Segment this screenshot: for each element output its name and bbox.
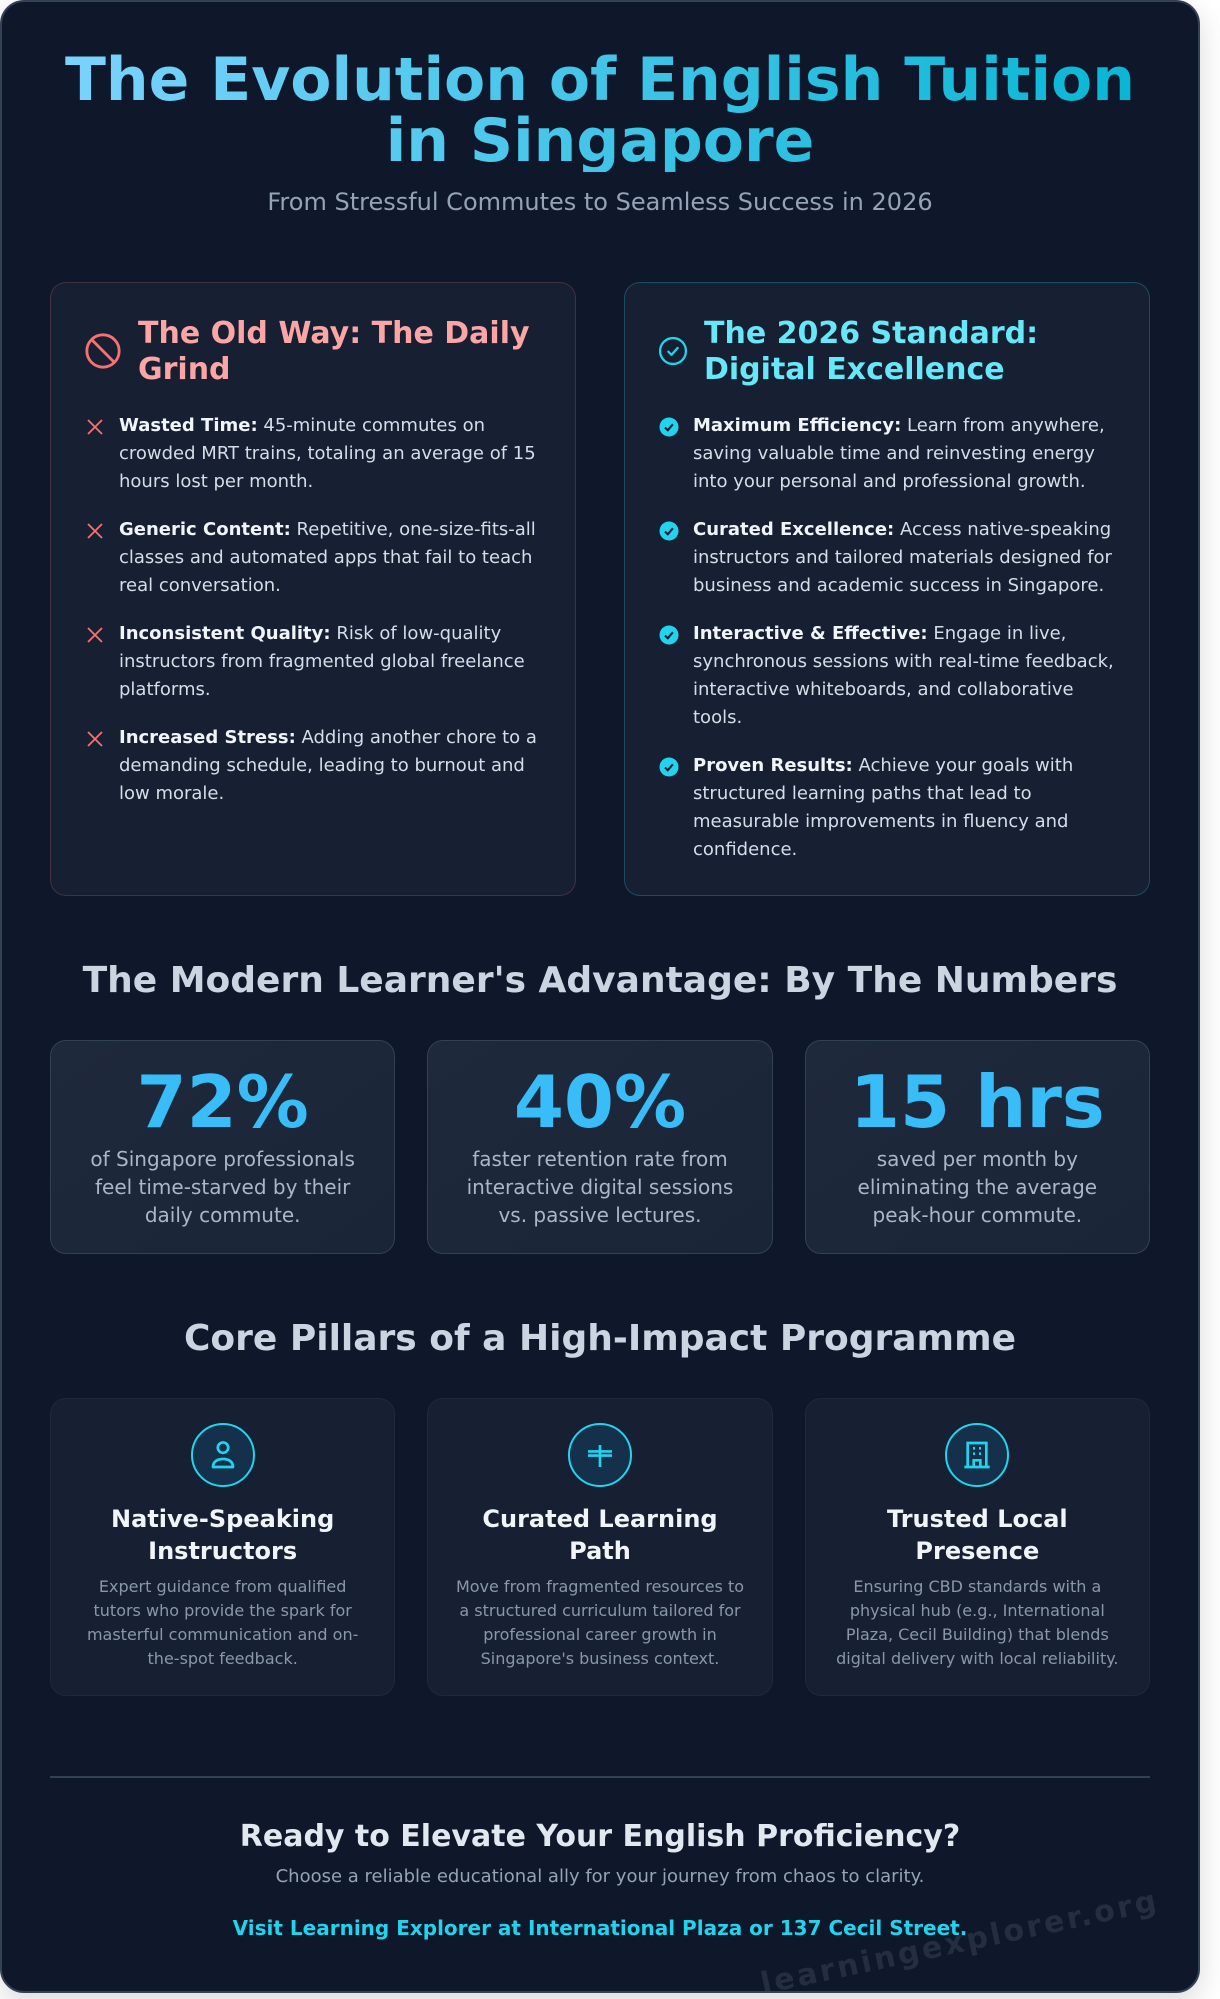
2026 standard list: into your personal and professional growth.: [693, 471, 1086, 492]
2026 standard list: Curated Excellence: Access native-speaking: [693, 519, 1111, 540]
old way list: crowded MRT trains, totaling an average of 15: [119, 443, 536, 464]
heading: old way: Grind: [138, 352, 231, 387]
2026 standard list: business and academic success in Singapore.: [693, 575, 1104, 596]
old way list: hours lost per month.: [119, 471, 313, 492]
pillar title: Native-Speaking: [111, 1505, 334, 1533]
stat description: eliminating the average: [858, 1175, 1097, 1199]
pillar card: local presence: [805, 1398, 1150, 1696]
stat number: 72%: [136, 1060, 309, 1144]
old way list: demanding schedule, leading to burnout and: [119, 755, 525, 776]
stat description: peak-hour commute.: [873, 1203, 1082, 1227]
stat card: 40%: [427, 1040, 773, 1254]
pillar title: [111, 1505, 334, 1565]
pillar description: a structured curriculum tailored for: [459, 1601, 741, 1620]
2026 standard list: Proven Results: Achieve your goals with: [693, 755, 1073, 776]
pillar description: Ensuring CBD standards with a: [853, 1577, 1101, 1596]
old way list: instructors from fragmented global freelance: [119, 651, 525, 672]
pillar description: tutors who provide the spark for: [94, 1601, 352, 1620]
old way list: Inconsistent Quality: Risk of low-quality: [119, 623, 501, 644]
2026 standard list: structured learning paths that lead to: [693, 783, 1032, 804]
pillar title: Presence: [915, 1537, 1039, 1565]
title: in Singapore: [386, 106, 814, 176]
pillar description: masterful communication and on-: [87, 1625, 358, 1644]
old way list: Generic Content: Repetitive, one-size-fits-all: [119, 519, 536, 540]
2026 standard list: interactive whiteboards, and collaborative: [693, 679, 1074, 700]
old way list: Increased Stress: Adding another chore to a: [119, 727, 537, 748]
icon: person: [191, 1423, 255, 1487]
2026 standard list: Interactive & Effective: Engage in live,: [693, 623, 1066, 644]
icon: prohibited circle: [85, 333, 121, 369]
stat description: faster retention rate from: [472, 1147, 728, 1171]
pillar card: learning path: [427, 1398, 773, 1696]
pillar title: [887, 1505, 1068, 1565]
icon: check circle: [658, 336, 688, 366]
pillar title: Instructors: [148, 1537, 297, 1565]
pillar title: Trusted Local: [887, 1505, 1068, 1533]
pillar title: [482, 1505, 718, 1565]
icon: signpost: [568, 1423, 632, 1487]
cta text: Choose a reliable educational ally for your journey from chaos to clarity.: [276, 1866, 924, 1887]
stat description: [467, 1147, 733, 1227]
2026 standard list: [660, 415, 1114, 860]
heading: old way: [138, 316, 530, 387]
pillar description: Singapore's business context.: [481, 1649, 719, 1668]
old way list: real conversation.: [119, 575, 281, 596]
stat description: feel time-starved by their: [95, 1175, 350, 1199]
old way list: low morale.: [119, 783, 224, 804]
cta link: Visit Learning Explorer at International Plaza or 137 Cecil Street.: [233, 1916, 967, 1940]
title: The Evolution of English Tuition: [65, 45, 1135, 115]
stat card: 15 hrs: [805, 1040, 1150, 1254]
pillar description: [456, 1577, 744, 1668]
stat description: daily commute.: [145, 1203, 300, 1227]
stat description: [858, 1147, 1097, 1227]
title: [50, 50, 1150, 172]
subtitle: From Stressful Commutes to Seamless Success in 2026: [267, 188, 933, 216]
pillar description: Plaza, Cecil Building) that blends: [846, 1625, 1109, 1644]
pillar description: [87, 1577, 358, 1668]
panel: the 2026 standard: [624, 282, 1150, 896]
2026 standard list: measurable improvements in fluency and: [693, 811, 1068, 832]
2026 standard list: saving valuable time and reinvesting energy: [693, 443, 1095, 464]
old way list: classes and automated apps that fail to teach: [119, 547, 532, 568]
cta heading: Ready to Elevate Your English Proficiency?: [240, 1819, 960, 1854]
pillar description: professional career growth in: [483, 1625, 717, 1644]
heading: core pillars: Core Pillars of a High-Impact Programme: [184, 1318, 1016, 1359]
stat description: [90, 1147, 355, 1227]
pillar card: instructors: [50, 1398, 395, 1696]
heading: 2026 standard: [704, 316, 1038, 387]
stat card: 72%: [50, 1040, 395, 1254]
panel: the old way: [50, 282, 576, 896]
2026 standard list: instructors and tailored materials designed for: [693, 547, 1112, 568]
old way list: [87, 415, 537, 804]
heading: old way: The Old Way: The Daily: [138, 316, 530, 351]
old way list: Wasted Time: 45-minute commutes on: [119, 415, 485, 436]
pillar title: Curated Learning: [482, 1505, 718, 1533]
pillar description: the-spot feedback.: [148, 1649, 298, 1668]
stat description: of Singapore professionals: [90, 1147, 355, 1171]
pillar description: digital delivery with local reliability.: [836, 1649, 1118, 1668]
stat number: 15 hrs: [850, 1060, 1105, 1144]
stat description: vs. passive lectures.: [498, 1203, 702, 1227]
heading: 2026 standard: The 2026 Standard:: [704, 316, 1038, 351]
2026 standard list: tools.: [693, 707, 742, 728]
stat description: interactive digital sessions: [467, 1175, 733, 1199]
stat description: saved per month by: [877, 1147, 1078, 1171]
pillar description: Move from fragmented resources to: [456, 1577, 744, 1596]
heading: 2026 standard: Digital Excellence: [704, 352, 1005, 387]
2026 standard list: confidence.: [693, 839, 797, 860]
2026 standard list: Maximum Efficiency: Learn from anywhere,: [693, 415, 1105, 436]
pillar description: [836, 1577, 1118, 1668]
pillar title: Path: [569, 1537, 631, 1565]
old way list: platforms.: [119, 679, 211, 700]
stat number: 40%: [514, 1060, 686, 1144]
pillar description: physical hub (e.g., International: [850, 1601, 1105, 1620]
2026 standard list: synchronous sessions with real-time feedback,: [693, 651, 1114, 672]
heading: by the numbers: The Modern Learner's Advantage: By The Numbers: [83, 960, 1117, 1001]
icon: building: [945, 1423, 1009, 1487]
pillar description: Expert guidance from qualified: [99, 1577, 346, 1596]
